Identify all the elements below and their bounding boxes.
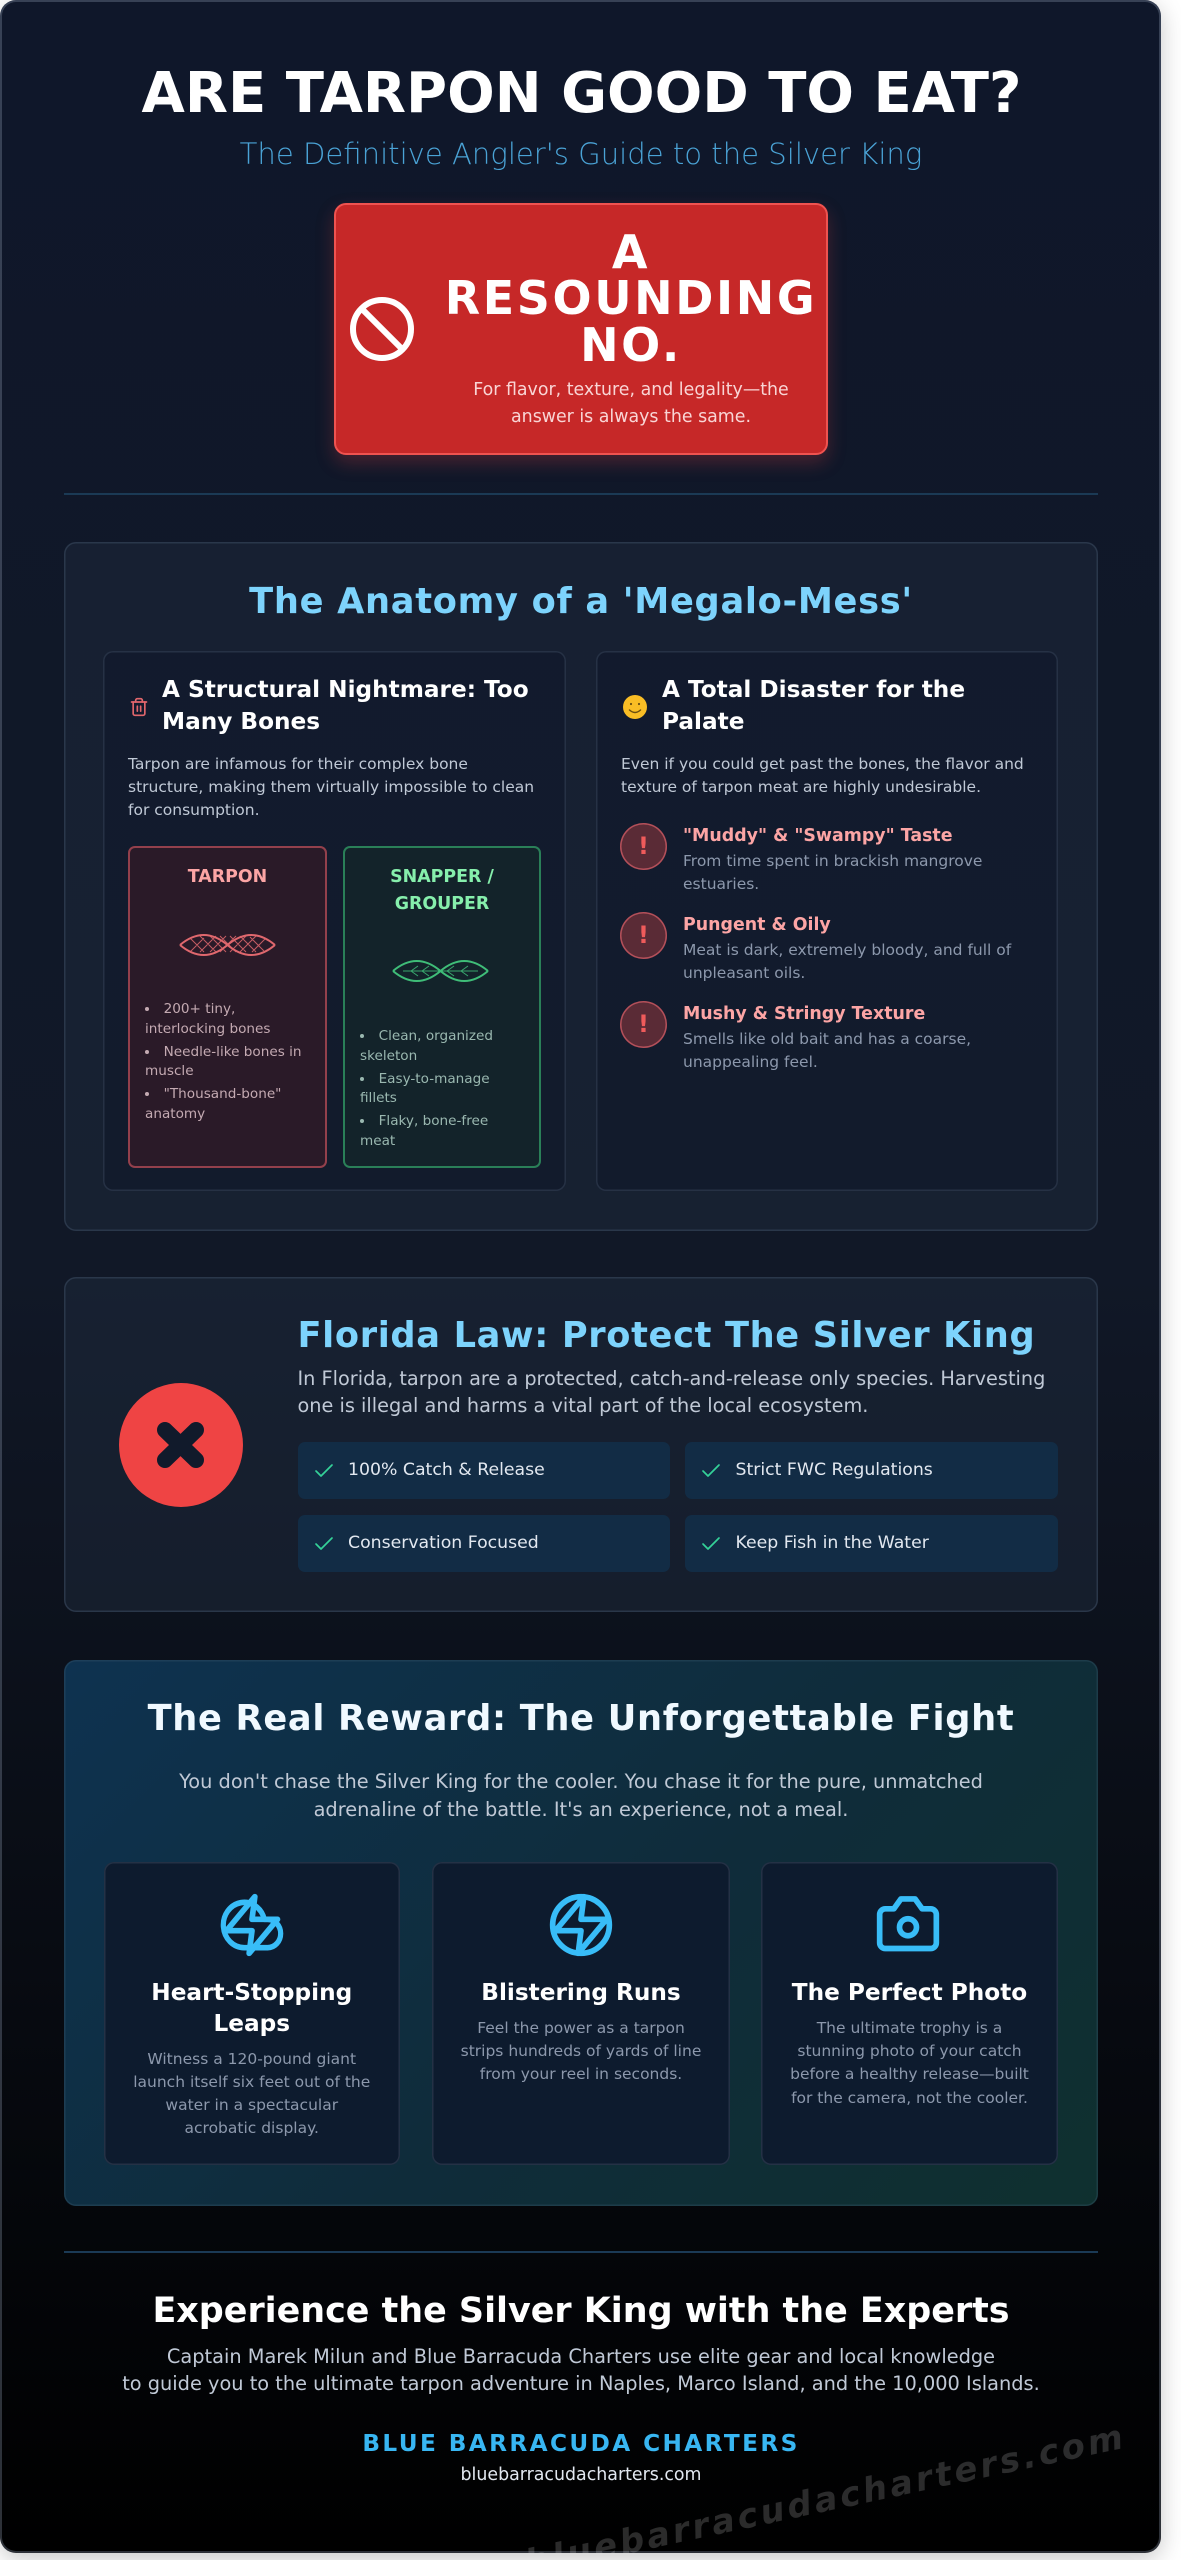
badge: regulations: Strict FWC Regulations — [736, 1460, 933, 1480]
icon: circle lightning — [550, 1894, 612, 1956]
verdict headline: A — [612, 225, 650, 279]
item: muddy taste — [620, 823, 982, 893]
list: tarpon facts: Needle-like bones in muscle — [145, 1044, 302, 1079]
text: bones intro — [128, 755, 534, 819]
icon: prohibition sign — [350, 297, 414, 361]
panel: florida law — [64, 1277, 1098, 1612]
text: real reward: You don't chase the Silver King for the cooler. You chase it for the pure, unmatched — [179, 1770, 983, 1793]
icon: cloud lightning — [220, 1894, 284, 1956]
card title: Heart-Stopping — [151, 1979, 352, 2006]
subtitle: The Definitive Angler's Guide to the Silver King — [240, 137, 922, 171]
icon: tarpon skeleton — [179, 934, 276, 956]
card: leaps — [104, 1862, 400, 2164]
verdict headline: RESOUNDING — [445, 271, 817, 325]
icon: warning: ! — [638, 832, 649, 860]
icon: warning — [620, 823, 667, 870]
heading: palate: Palate — [662, 708, 744, 735]
verdict headline — [445, 225, 817, 372]
text: florida law: one is illegal and harms a vital part of the local ecosystem. — [298, 1394, 868, 1417]
text: real reward: adrenaline of the battle. It's an experience, not a meal. — [314, 1798, 848, 1821]
card text: stunning photo of your catch — [797, 2042, 1022, 2060]
card text: from your reel in seconds. — [480, 2065, 682, 2083]
item text: From time spent in brackish mangrove — [683, 852, 982, 870]
panel: palate — [596, 651, 1058, 1191]
item title: Pungent & Oily — [683, 915, 831, 935]
text: bones intro: for consumption. — [128, 801, 260, 819]
card: runs — [432, 1862, 730, 2164]
list: tarpon facts: 200+ tiny, interlocking bones — [145, 1001, 270, 1036]
panel: bones — [103, 651, 566, 1191]
icon: warning — [620, 912, 667, 959]
heading: bones: Many Bones — [162, 708, 320, 735]
card text — [461, 2019, 701, 2083]
card text: before a healthy release—built — [790, 2065, 1029, 2083]
label: snapper: SNAPPER / — [390, 867, 494, 887]
icon: trash — [130, 698, 148, 716]
item text — [683, 941, 1012, 982]
footer text: Captain Marek Milun and Blue Barracuda Charters use elite gear and local knowledge — [167, 2344, 995, 2368]
list: tarpon facts: "Thousand-bone" anatomy — [145, 1086, 281, 1122]
icon: smile face — [623, 695, 647, 719]
heading: real reward: The Real Reward: The Unforgettable Fight — [148, 1698, 1014, 1739]
title: ARE TARPON GOOD TO EAT? — [142, 61, 1021, 126]
text: bones intro: structure, making them virtually impossible to clean — [128, 778, 534, 796]
brand url: bluebarracudacharters.com — [460, 2465, 702, 2485]
icon: red x — [119, 1383, 243, 1507]
label: snapper: GROUPER — [395, 894, 489, 914]
verdict subtext: For flavor, texture, and legality—the — [473, 380, 789, 400]
item title: Mushy & Stringy Texture — [683, 1004, 925, 1024]
heading: bones: A Structural Nightmare: Too — [162, 676, 529, 703]
heading: palate — [662, 676, 965, 735]
item: pungent — [620, 912, 1012, 982]
badge: keep fish: Keep Fish in the Water — [736, 1533, 929, 1553]
card text — [790, 2019, 1029, 2107]
list: snapper facts — [360, 1028, 493, 1148]
list: snapper facts: Flaky, bone-free meat — [360, 1113, 488, 1148]
item text — [683, 852, 982, 893]
label: tarpon: TARPON — [188, 867, 267, 887]
card text: launch itself six feet out of the — [133, 2073, 370, 2091]
footer heading: Experience the Silver King with the Experts — [152, 2291, 1010, 2331]
badge: conservation: Conservation Focused — [348, 1533, 539, 1553]
text: palate intro — [621, 755, 1024, 796]
card title: Blistering Runs — [481, 1979, 681, 2006]
label: snapper — [390, 867, 494, 914]
heading: anatomy: The Anatomy of a 'Megalo-Mess' — [249, 581, 913, 622]
card text: acrobatic display. — [185, 2119, 319, 2137]
verdict subtext — [473, 380, 789, 426]
card text: water in a spectacular — [165, 2096, 338, 2114]
verdict subtext: answer is always the same. — [511, 406, 751, 426]
icon: warning: ! — [638, 1010, 649, 1038]
list: snapper facts: Clean, organized skeleton — [360, 1028, 493, 1064]
item text: Meat is dark, extremely bloody, and full of — [683, 941, 1011, 959]
item text: estuaries. — [683, 875, 759, 893]
list: snapper facts: Easy-to-manage fillets — [360, 1070, 490, 1106]
icon: warning: ! — [638, 921, 649, 949]
text: real reward — [179, 1770, 983, 1821]
comparison card: snapper — [343, 846, 541, 1168]
badge: catch and release: 100% Catch & Release — [348, 1460, 545, 1480]
card title — [151, 1979, 352, 2037]
card text: strips hundreds of yards of line — [461, 2042, 701, 2060]
card text: The ultimate trophy is a — [817, 2019, 1002, 2037]
item: mushy — [620, 1001, 971, 1071]
item text: unappealing feel. — [683, 1053, 818, 1071]
badge: keep fish — [685, 1515, 1058, 1572]
text: florida law: In Florida, tarpon are a protected, catch-and-release only species. Harvesting — [298, 1367, 1045, 1390]
item text: unpleasant oils. — [683, 964, 805, 982]
card title: Leaps — [213, 2010, 290, 2037]
card text — [133, 2050, 370, 2137]
item text: Smells like old bait and has a coarse, — [683, 1030, 971, 1048]
verdict headline: NO. — [580, 318, 682, 372]
text: palate intro: texture of tarpon meat are highly undesirable. — [621, 778, 981, 796]
text: palate intro: Even if you could get past the bones, the flavor and — [621, 755, 1024, 773]
card: photo — [761, 1862, 1058, 2164]
icon: warning — [620, 1001, 667, 1048]
card text: Feel the power as a tarpon — [477, 2019, 685, 2037]
heading: palate: A Total Disaster for the — [662, 676, 965, 703]
brand name: BLUE BARRACUDA CHARTERS — [362, 2430, 800, 2456]
list: tarpon facts — [145, 1001, 302, 1122]
panel: real reward — [64, 1660, 1098, 2206]
item text — [683, 1030, 971, 1071]
icon: camera — [876, 1896, 940, 1952]
heading: florida law: Florida Law: Protect The Silver King — [298, 1315, 1035, 1356]
panel: anatomy — [64, 542, 1098, 1231]
comparison card: tarpon — [128, 846, 327, 1168]
text: bones intro: Tarpon are infamous for their complex bone — [128, 755, 468, 773]
icon: snapper skeleton — [392, 960, 489, 982]
heading: bones — [162, 676, 529, 735]
item title: "Muddy" & "Swampy" Taste — [683, 826, 953, 846]
badge: regulations — [685, 1442, 1058, 1499]
badge: conservation — [298, 1515, 670, 1572]
badge: catch and release — [298, 1442, 670, 1499]
card title: The Perfect Photo — [792, 1979, 1027, 2006]
verdict callout — [334, 203, 828, 455]
card text: Witness a 120-pound giant — [147, 2050, 356, 2068]
card text: for the camera, not the cooler. — [791, 2089, 1028, 2107]
text: florida law — [298, 1367, 1045, 1417]
footer text — [122, 2344, 1040, 2394]
footer text: to guide you to the ultimate tarpon adventure in Naples, Marco Island, and the 10,000 Islands. — [122, 2372, 1040, 2394]
